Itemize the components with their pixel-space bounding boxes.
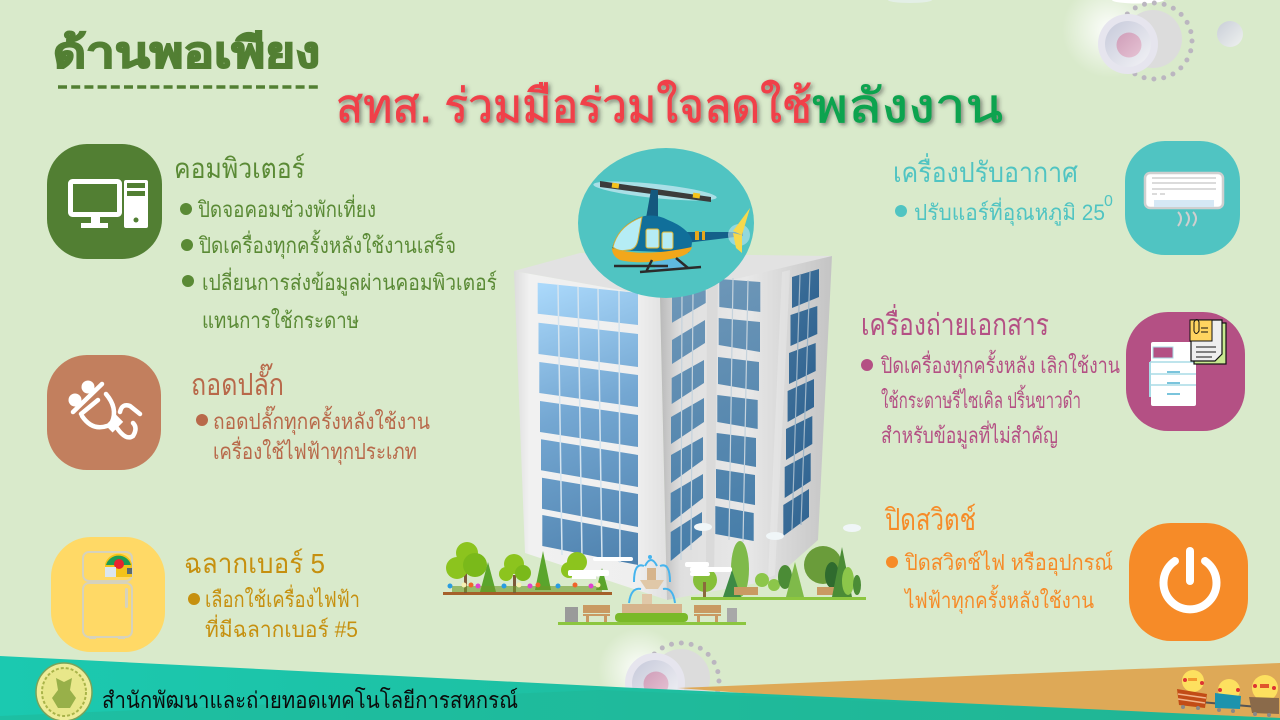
tips: copier: ปิดเครื่องทุกครั้งหลัง เลิกใช้งาน — [880, 350, 1120, 379]
icon: air conditioner — [1125, 141, 1240, 255]
panel: copier — [861, 304, 1245, 449]
title: main headline: สทส. ร่วมมือร่วมใจลดใช้ — [336, 79, 812, 132]
title: main headline: พลังงาน — [812, 79, 1003, 132]
heading: switch off: ปิดสวิตช์ — [884, 503, 976, 537]
windows left face — [538, 283, 638, 565]
heading: air conditioner: เครื่องปรับอากาศ — [893, 153, 1078, 188]
tips: computer: ปิดจอคอมช่วงพักเที่ยง — [197, 194, 376, 222]
helicopter — [593, 178, 750, 272]
tips: unplug: เครื่องใช้ไฟฟ้าทุกประเภท — [213, 436, 417, 465]
panel: unplug — [47, 355, 430, 470]
tips: switch off: ปิดสวิตช์ไฟ หรืออุปกรณ์ — [904, 550, 1113, 576]
tips: label no.5: เลือกใช้เครื่องไฟฟ้า — [205, 584, 360, 612]
tips: air conditioner — [895, 193, 1113, 226]
heading: label no.5: ฉลากเบอร์ 5 — [184, 548, 325, 579]
footer logo — [36, 663, 92, 720]
illustration: fountain plaza — [558, 555, 746, 625]
building left face — [514, 271, 667, 600]
tips: label no.5 — [188, 584, 360, 642]
illustration: right garden — [691, 541, 866, 600]
tips: copier: ใช้กระดาษรีไซเคิล ปริ้นขาวดำ — [881, 385, 1081, 413]
illustration: helicopter badge — [578, 148, 754, 298]
illustration: clouds — [568, 523, 861, 579]
illustration: left garden — [443, 542, 612, 595]
heading: copier: เครื่องถ่ายเอกสาร — [861, 304, 1049, 342]
tips: unplug: ถอดปลั๊กทุกครั้งหลังใช้งาน — [213, 405, 430, 435]
tips: switch off: ไฟฟ้าทุกครั้งหลังใช้งาน — [903, 585, 1094, 614]
footer band — [0, 656, 1280, 720]
tips: copier: สำหรับข้อมูลที่ไม่สำคัญ — [881, 420, 1058, 449]
tips: computer: เปลี่ยนการส่งข้อมูลผ่านคอมพิวเตอร์ — [202, 267, 497, 296]
illustration: building — [514, 253, 832, 600]
footer text: สำนักพัฒนาและถ่ายทอดเทคโนโลยีการสหกรณ์ — [102, 687, 518, 713]
decoration: bottom centre discs — [598, 628, 719, 719]
title: section heading: ด้านพอเพียง — [53, 29, 320, 76]
decoration: top right discs — [888, 0, 1243, 79]
panel: computer — [47, 144, 497, 333]
panel: air conditioner — [893, 141, 1240, 255]
tips: computer — [180, 194, 497, 333]
panel: label no.5 — [51, 537, 360, 652]
tips: computer: แทนการใช้กระดาษ — [202, 308, 359, 333]
tips: computer: ปิดเครื่องทุกครั้งหลังใช้งานเสร็จ — [198, 230, 456, 259]
benches — [583, 605, 721, 622]
tips: switch off — [886, 550, 1113, 614]
icon: fridge with label — [51, 537, 165, 652]
heading underline — [58, 85, 320, 89]
tips: unplug — [196, 405, 430, 465]
tips: air conditioner: ปรับแอร์ที่อุณหภูมิ 25 — [914, 197, 1105, 226]
windows inner face — [671, 290, 706, 561]
tips: copier — [861, 350, 1120, 449]
heading: computer: คอมพิวเตอร์ — [174, 153, 305, 184]
tips: air conditioner: 0 — [1104, 193, 1113, 210]
icon: chicks in baskets — [1177, 670, 1279, 717]
panel: switch off — [884, 503, 1248, 641]
windows right face — [783, 269, 819, 536]
windows centre face — [715, 278, 760, 542]
building roof — [514, 253, 832, 297]
icon: computer — [47, 144, 162, 259]
icon: copier and documents — [1126, 312, 1245, 431]
icon: plug — [47, 355, 161, 470]
icon: power button — [1129, 523, 1248, 641]
heading: unplug: ถอดปลั๊ก — [191, 363, 284, 402]
tips: label no.5: ที่มีฉลากเบอร์ #5 — [205, 614, 358, 642]
